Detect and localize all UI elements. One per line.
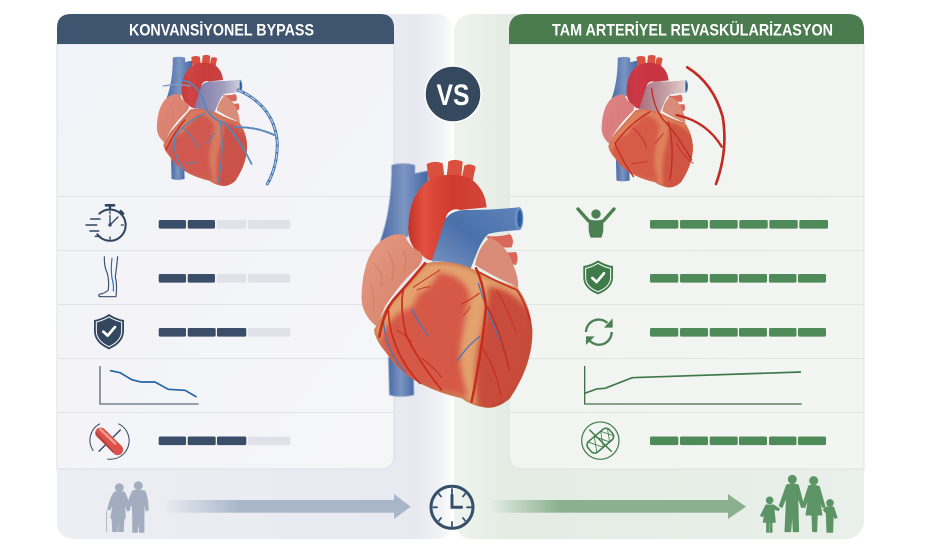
panel: right comparison background: [454, 14, 864, 539]
illustration: central heart: [362, 160, 535, 411]
heading bar: [57, 14, 394, 44]
row dividers: [58, 196, 394, 412]
bar: row 1 rating: [159, 220, 290, 229]
arrow: right timeline: [490, 494, 746, 519]
icon: circular arrows: [586, 318, 613, 345]
bar: row 2 rating: [650, 274, 826, 283]
icon: stopwatch: [86, 205, 126, 241]
heading bar: TAM ARTERİYEL REVASKÜLARİZASYON: [552, 20, 833, 40]
chart: declining line: [100, 366, 199, 404]
bar: row 5 rating: [650, 436, 826, 445]
icon: clock: [431, 486, 473, 528]
badge: VS: [425, 66, 481, 122]
badge: VS: VS: [436, 79, 470, 112]
panel: left comparison background: [57, 14, 453, 539]
row dividers: [510, 196, 864, 412]
bar: row 5 rating: [159, 436, 290, 445]
chart: rising line: [585, 366, 802, 404]
icon: elderly couple: [107, 482, 148, 532]
bar: row 3 rating: [159, 328, 290, 337]
illustration: heart with vein grafts: [157, 55, 277, 188]
bar: row 2 rating: [159, 274, 290, 283]
bar: row 3 rating: [650, 328, 826, 337]
arrow: left timeline: [163, 494, 411, 519]
icon: shield with check: [94, 314, 124, 349]
panel body: [509, 44, 864, 469]
icon: green shield with check: [583, 260, 613, 294]
icon: leg with vein: [99, 257, 118, 297]
icon: family: [761, 475, 837, 532]
panel: konvansiyonel bypass: [57, 14, 394, 469]
icon: crossed-out stent: [582, 422, 619, 459]
icon: crossed-out graft: [90, 424, 129, 459]
panel body: [57, 44, 394, 469]
bar: row 1 rating: [650, 220, 828, 229]
panel: tam arteriyel revaskülarizasyon: [509, 14, 864, 469]
illustration: heart with arterial grafts: [602, 55, 724, 189]
heading bar: [509, 14, 864, 44]
heading bar: KONVANSİYONEL BYPASS: [129, 20, 314, 40]
icon: person with raised arms: [578, 209, 614, 238]
